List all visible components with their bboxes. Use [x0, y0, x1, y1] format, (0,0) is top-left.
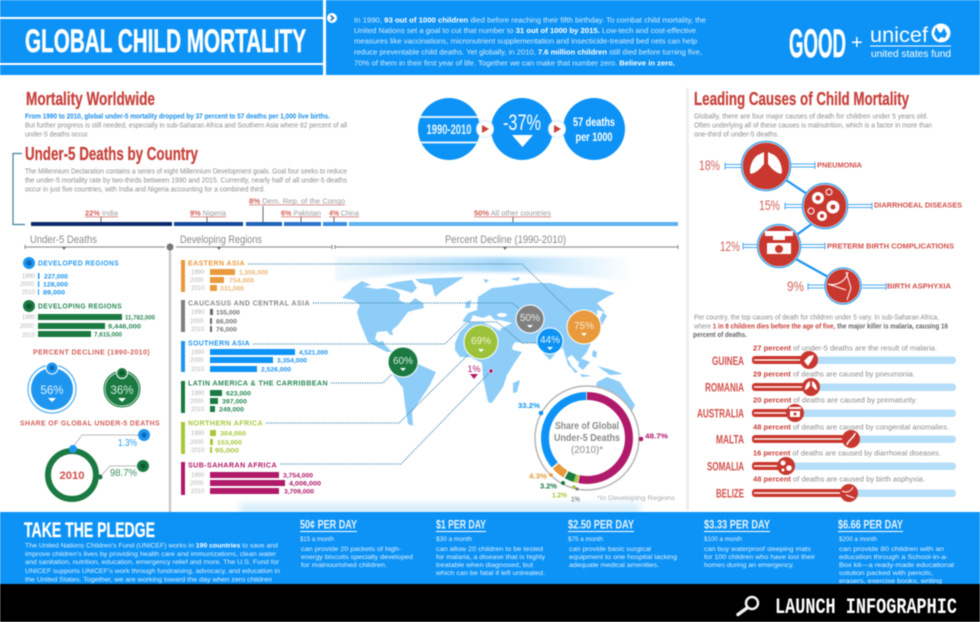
bars: developing regions: 9,446,000 [108, 324, 142, 330]
intro text: United Nations set a goal to cut that number to 31 out of 1000 by 2015. Low-tech and cost-effective [354, 28, 696, 35]
intro text: measures like vaccinations, micronutrient supplementation and insecticide-treated bed nets can help [354, 38, 697, 46]
bubble: latin america 60 percent [388, 347, 418, 377]
chart: share by country bar [31, 198, 678, 226]
bars: developing regions: 2010 [22, 333, 36, 339]
pledge: 1 dollar per day [435, 518, 546, 577]
heading: under-5 deaths by country: Under-5 Deaths by Country [25, 144, 198, 164]
cause: pneumonia: 18% [699, 157, 720, 173]
text block: causes intro: Often underlying all of these causes is malnutrition, which is a factor in more than [694, 122, 932, 130]
chart: eastern asia [181, 260, 269, 292]
pledge: 1 dollar per day: for malaria, a disease that is highly [436, 554, 546, 561]
chart: sub-saharan africa: 3,754,000 [283, 474, 314, 480]
chart: share of global under-5 deaths donut: Share of Global [555, 420, 619, 432]
bars: developed regions: 128,000 [43, 282, 69, 288]
icon: developing regions [23, 300, 35, 312]
text block: pledge description: and sanitation, nutrition, education, emergency relief and more. The U.S. Fund for [25, 559, 280, 566]
row: australia: 20 percent of deaths are caused by prematurity. [753, 398, 917, 404]
title: GLOBAL CHILD MORTALITY [25, 23, 306, 59]
chart: -37 percent circles: 57 deaths [573, 115, 615, 129]
chart: share of global under-5 deaths donut: 3.2% [540, 482, 557, 490]
row: australia [697, 398, 956, 422]
chart: southern asia [181, 340, 329, 374]
text block: pledge description: UNICEF supports UNICEF's work through fundraising, advocacy, and education in [25, 568, 280, 575]
pledge: 2.50 dollars per day: $2.50 PER DAY [568, 518, 634, 532]
chart: latin america and the caribbean: 397,000 [222, 400, 248, 406]
chart: share of global under-5 deaths donut: *In Developing Regions [597, 495, 676, 502]
text block: mortality worldwide: From 1990 to 2010, global under-5 mortality dropped by 37 percent to 57 deaths per 1,000 live births. [25, 114, 330, 120]
chart: sub-saharan africa: 2000 [190, 481, 204, 487]
row: romania: 29 percent of deaths are caused by pneumonia. [753, 372, 915, 378]
chart: caucasus and central asia: 76,000 [216, 328, 238, 334]
chart: share by country bar: 50% All other countries [474, 210, 552, 218]
chart: sub-saharan africa [181, 462, 322, 496]
dotted leader lines [248, 264, 572, 464]
intro text: 70% of them in their first year of life. Together we can make that number zero. Believe in zero. [354, 60, 675, 68]
text block: mortality worldwide: But further progress is still needed, especially in sub-Saharan Africa and Southern Asia where 82 percent of all [25, 122, 347, 130]
pledge: 1 dollar per day: which can be fatal if left untreated. [435, 570, 545, 577]
pledge: 3.33 dollars per day: homes during an emergency. [704, 562, 794, 569]
row: malta: 48 percent of deaths are caused by congenital anomalies. [753, 424, 949, 432]
pledge: 1 dollar per day: $30 a month [436, 536, 472, 543]
map glow [215, 257, 755, 392]
pledge: 2.50 dollars per day: $75 a month [568, 536, 603, 543]
chart: southern asia: 2,526,000 [261, 368, 292, 374]
chart: sub-saharan africa: 1990 [191, 473, 205, 479]
chart: -37 percent circles: per 1000 [576, 130, 613, 144]
chart: -37 percent circles: 1990-2010 [426, 121, 472, 137]
chart: 36 percent decline [103, 368, 141, 408]
text block: millennium declaration: the under-5 mortality rate by two-thirds between 1990 and 2015. Currently, nearly half of all under-5 deaths [25, 178, 347, 184]
heading: mortality worldwide: Mortality Worldwide [26, 89, 155, 109]
row: australia: AUSTRALIA [697, 406, 744, 420]
row: guinea [712, 346, 956, 369]
bubble: sub-saharan africa 1 percent [467, 364, 493, 379]
pledge: 50 cents per day [300, 518, 413, 569]
text block: millennium declaration: occur in just five countries, with India and Nigeria accounting for a combined third. [25, 186, 265, 194]
logos: GOOD and unicef: + [851, 32, 863, 54]
pledge: 2.50 dollars per day: adequate medical amenities. [569, 562, 659, 569]
bars: developed regions: 2000 [20, 282, 35, 288]
intro text: reduce preventable child deaths. Yet globally, in 2010, 7.6 million children still died before turning five, [354, 50, 702, 56]
bubble: northern africa 69 percent: 69% [471, 336, 491, 347]
chart: northern africa: 304,000 [220, 432, 247, 438]
bars: developed regions: 2010 [22, 290, 36, 296]
chart: share of global under-5 deaths donut: 4.3% [529, 472, 547, 480]
bubble: eastern asia 75 percent [567, 310, 601, 344]
chart: southern asia: 2010 [191, 367, 205, 373]
chart: share of global under-5 deaths donut: 1% [571, 494, 580, 504]
chart: northern africa: 153,000 [217, 440, 243, 446]
North America [342, 287, 424, 352]
chart: 2010 share donut [48, 429, 150, 499]
cause: diarrhoeal diseases: 15% [759, 197, 780, 213]
row: guinea: GUINEA [712, 354, 744, 368]
heading: take the pledge: TAKE THE PLEDGE [24, 519, 155, 542]
text block: per country [693, 314, 948, 339]
heading: share of global deaths: SHARE OF GLOBAL UNDER-5 DEATHS [20, 420, 160, 428]
cause: birth asphyxia: 9% [787, 278, 804, 294]
chart: latin america and the caribbean: LATIN AMERICA & THE CARRIBBEAN [188, 380, 328, 388]
text block: mortality worldwide [25, 114, 347, 138]
chart: share of global under-5 deaths donut: 48.7% [645, 432, 668, 440]
pledge: 2.50 dollars per day: equipment to one hospital lacking [569, 554, 677, 561]
chart: latin america and the caribbean: 2010 [191, 407, 205, 413]
row: somalia: SOMALIA [707, 460, 744, 474]
section axes [25, 234, 678, 512]
chart: latin america and the caribbean: 623,000 [226, 392, 252, 398]
cause: pneumonia [699, 142, 862, 190]
bars: developed regions: 1990 [22, 274, 36, 280]
pledge: 1 dollar per day: treatable when diagnosed, but [436, 562, 533, 569]
bars: developing regions: 2000 [20, 324, 35, 330]
text block: pledge description: improve children's lives by providing health care and immunizations, clean water [25, 551, 277, 558]
heading: percent decline: PERCENT DECLINE (1990-2010) [33, 350, 150, 356]
pledge: 1 dollar per day: can allow 20 children to be tested [436, 546, 543, 553]
row: malta [716, 424, 956, 448]
legend label: developed regions: DEVELOPED REGIONS [38, 260, 119, 268]
bars: developing regions: 7,615,000 [94, 332, 123, 338]
pledge: 6.66 dollars per day: Box kit—a ready-made educational [839, 562, 955, 569]
chart: southern asia: 1990 [191, 350, 205, 356]
logos: GOOD and unicef: GOOD [789, 22, 846, 66]
row: malta: MALTA [716, 432, 744, 446]
world map [342, 277, 635, 426]
pledge: 3.33 dollars per day [704, 518, 816, 569]
intro text [354, 18, 706, 68]
chart: share of global under-5 deaths donut: Under-5 Deaths [554, 432, 620, 444]
text block: millennium declaration: The Millennium Declaration contains a series of eight Millennium Development goals. Goal four seeks to reduce [25, 168, 347, 176]
chart: caucasus and central asia: 86,000 [216, 320, 238, 326]
bars: developed regions: 227,000 [44, 274, 69, 280]
chart: eastern asia: EASTERN ASIA [188, 260, 245, 268]
text block: causes intro: Globally, there are four major causes of death for children under 5 years old. [694, 114, 928, 120]
pledge: 50 cents per day: 50¢ PER DAY [300, 518, 357, 532]
text block: pledge description: The United Nations Children's Fund (UNICEF) works in 190 countries to save and [25, 542, 278, 550]
text block: millennium declaration [25, 168, 347, 194]
chart: sub-saharan africa: 3,709,000 [284, 490, 315, 496]
Australia [590, 377, 635, 425]
Greenland [415, 277, 464, 297]
bars: developed regions [20, 273, 69, 296]
chart: share of global under-5 deaths donut: 1.2% [552, 490, 567, 500]
text block: pledge description: the United States. Together, we are working toward the day when zero children [25, 576, 272, 584]
panel: leading causes of child mortality [686, 88, 962, 510]
cause: birth asphyxia [787, 268, 951, 304]
chart: 2010 share donut: 1.3% [118, 438, 137, 449]
map percent bubbles [388, 305, 601, 379]
chart: 2010 share donut: 98.7% [110, 468, 137, 479]
cause: preterm birth complications [720, 224, 954, 268]
chart: northern africa: 95,000 [215, 448, 240, 454]
chart: share of global under-5 deaths donut: (2010)* [571, 444, 603, 456]
bubble: sub-saharan africa 1 percent: 1% [467, 364, 481, 374]
icon: play button 2 [548, 120, 566, 138]
chart: 56 percent decline: 56% [40, 383, 64, 397]
chart: latin america and the caribbean [181, 380, 328, 414]
pledge: 2.50 dollars per day [568, 518, 677, 569]
bubble: latin america 60 percent: 60% [393, 356, 413, 367]
chart: eastern asia: 754,000 [229, 278, 255, 284]
chart: caucasus and central asia: CAUCASUS AND CENTRAL ASIA [188, 300, 310, 308]
row: belize: BELIZE [716, 486, 744, 500]
chart: share of global under-5 deaths donut [518, 386, 676, 504]
section axes: Developing Regions [180, 234, 262, 246]
chart: share by country bar: 6% Pakistan [281, 210, 321, 218]
icon: header arrow [327, 13, 337, 23]
pledge: 6.66 dollars per day: $200 a month [839, 536, 877, 543]
chart: northern africa: 1990 [191, 431, 205, 437]
Arctic Canada [385, 280, 417, 293]
chart: southern asia: 4,521,000 [299, 350, 329, 356]
pledge: 2.50 dollars per day: can provide basic surgical [569, 546, 652, 553]
cause: pneumonia: PNEUMONIA [817, 162, 862, 170]
cause: diarrhoeal diseases [759, 184, 962, 228]
panel: under-5 deaths by country [13, 144, 678, 226]
logos: GOOD and unicef: unicef [870, 24, 928, 47]
row: somalia [707, 450, 956, 475]
logos: GOOD and unicef: united states fund [871, 49, 951, 60]
chart: eastern asia: 331,000 [220, 286, 245, 292]
chart: northern africa: 2010 [191, 448, 205, 454]
pledge: 3.33 dollars per day: $100 a month [704, 536, 742, 543]
cause: preterm birth complications: 12% [720, 238, 740, 254]
pledge: 3.33 dollars per day: can buy waterproof sleeping mats [704, 546, 812, 553]
chart: eastern asia: 2010 [191, 286, 205, 292]
pledge: 50 cents per day: for malnourished children. [301, 562, 387, 569]
pledge: 50 cents per day: energy biscuits specially developed [301, 554, 413, 561]
chart: caucasus and central asia: 2010 [191, 327, 205, 333]
row: belize: 48 percent of deaths are caused by birth asphyxia. [753, 476, 925, 484]
chart: eastern asia: 2000 [190, 278, 204, 284]
Eurasia [463, 283, 615, 370]
chart: northern africa [181, 420, 263, 454]
bars: developed regions: 89,000 [43, 290, 66, 296]
panel: under-5 deaths developed vs developing [20, 257, 160, 499]
chart: caucasus and central asia: 155,000 [216, 310, 241, 316]
chart: four causes [699, 142, 962, 304]
bars: developing regions: 11,782,000 [125, 316, 156, 322]
row: romania [705, 372, 956, 396]
panel: take the pledge [0, 512, 980, 585]
panel: developing regions bars [181, 260, 329, 496]
bubble: caucasus 50 percent [516, 305, 544, 333]
bubble: eastern asia 75 percent: 75% [574, 321, 594, 332]
chart: southern asia: 2000 [190, 358, 204, 364]
chart: northern africa: NORTHERN AFRICA [188, 420, 263, 428]
Africa [455, 322, 522, 403]
chart: latin america and the caribbean: 1990 [191, 391, 205, 397]
chart: -37 percent circles: -37% [503, 110, 541, 135]
text block: pledge description [25, 542, 280, 584]
pledge: 6.66 dollars per day: erasers, exercise books, writing [839, 578, 942, 585]
chart: share of global under-5 deaths donut: 33.2% [518, 401, 540, 410]
text block: causes intro: one-third of under-5 deaths. [694, 132, 779, 138]
chart: latin america and the caribbean: 2000 [190, 399, 204, 405]
bubble: northern africa 69 percent [464, 325, 498, 359]
chart: 2010 share donut: 2010 [60, 470, 84, 482]
cause: diarrhoeal diseases: DIARRHOEAL DISEASES [874, 202, 962, 210]
chart: share by country bar: 9% Nigeria [190, 210, 226, 218]
chart: sub-saharan africa: SUB-SAHARAN AFRICA [188, 462, 277, 470]
heading: leading causes: Leading Causes of Child Mortality [694, 89, 909, 109]
bars: developing regions [20, 314, 156, 339]
pledge: 6.66 dollars per day [838, 518, 955, 585]
row: belize [716, 476, 956, 502]
pledge: 1 dollar per day: $1 PER DAY [436, 518, 486, 532]
Islands [350, 277, 623, 393]
pledge: 3.33 dollars per day: for 100 children who have lost their [704, 554, 816, 561]
header band [0, 0, 980, 75]
panel: mortality worldwide text [25, 89, 347, 138]
icon: developed regions [23, 257, 35, 269]
text block: per country: Per country, the top causes of death for children under 5 vary. In sub-Saharan Africa, [694, 314, 939, 322]
chart: southern asia: 3,354,000 [277, 358, 308, 364]
chart: 56 percent decline [28, 362, 76, 413]
chart: share by country bar: 22% India [85, 210, 118, 218]
legend label: developing regions: DEVELOPING REGIONS [38, 304, 122, 310]
text block: per country: where 1 in 8 children dies before the age of five, the major killer is malaria, causing 16 [693, 324, 948, 330]
chart: 36 percent decline: 36% [110, 383, 134, 397]
chart: -37 percent circles [418, 98, 625, 160]
chart: southern asia: SOUTHERN ASIA [188, 340, 250, 348]
pledge: 6.66 dollars per day: $6.66 PER DAY [838, 518, 903, 532]
pledge: 50 cents per day: can provide 20 packets of high- [301, 546, 401, 553]
chart: caucasus and central asia: 2000 [190, 319, 204, 325]
row: somalia: 16 percent of deaths are caused by diarrhoeal diseases. [753, 450, 941, 458]
cause: preterm birth complications: PRETERM BIRTH COMPLICATIONS [827, 244, 954, 250]
chart: share by country bar: 8% Dem. Rep. of the Congo [249, 198, 345, 206]
section axes: Under-5 Deaths [30, 234, 97, 246]
chart: caucasus and central asia: 1990 [191, 310, 205, 316]
chart: caucasus and central asia [181, 300, 310, 334]
bubble: southern asia 44 percent: 44% [540, 335, 560, 346]
chart: share by country bar: 4% China [329, 210, 359, 218]
pledge: 6.66 dollars per day: can provide 80 children with an [839, 546, 944, 553]
cause: birth asphyxia: BIRTH ASPHYXIA [887, 284, 951, 290]
chart: latin america and the caribbean: 249,000 [219, 408, 245, 414]
intro text: In 1990, 93 out of 1000 children died before reaching their fifth birthday. To combat child mortality, the [354, 18, 706, 24]
chart: sub-saharan africa: 2010 [191, 489, 205, 495]
pledge: 6.66 dollars per day: solution packed with pencils, [839, 570, 933, 577]
pledge: 6.66 dollars per day: education through a School-in-a- [839, 554, 948, 561]
bars: developing regions: 1990 [22, 315, 36, 321]
pledge: 50 cents per day: $15 a month [300, 536, 334, 543]
row: romania: ROMANIA [705, 380, 744, 394]
text block: mortality worldwide: under-5 deaths occur. [25, 132, 89, 138]
chart: northern africa: 2000 [190, 440, 204, 446]
South America [390, 350, 436, 426]
icon: play button 1 [476, 120, 494, 138]
bottom glow [240, 504, 640, 514]
chart: eastern asia: 1990 [191, 270, 205, 276]
bubble: caucasus 50 percent: 50% [520, 313, 540, 324]
text block: causes intro [694, 114, 932, 138]
section axes: Percent Decline (1990-2010) [445, 234, 566, 246]
chart: eastern asia: 1,309,000 [239, 270, 269, 276]
bubble: southern asia 44 percent [537, 328, 563, 354]
chart: sub-saharan africa: 4,006,000 [289, 482, 322, 488]
text block: per country: percent of deaths. [693, 332, 747, 339]
arrow: bracket to timeline [13, 154, 25, 224]
icon: magnifying glass [738, 597, 758, 614]
pledge: 3.33 dollars per day: $3.33 PER DAY [704, 518, 770, 532]
row: guinea: 27 percent of under-5 deaths are the result of malaria. [753, 346, 937, 352]
footer bar [0, 584, 980, 622]
